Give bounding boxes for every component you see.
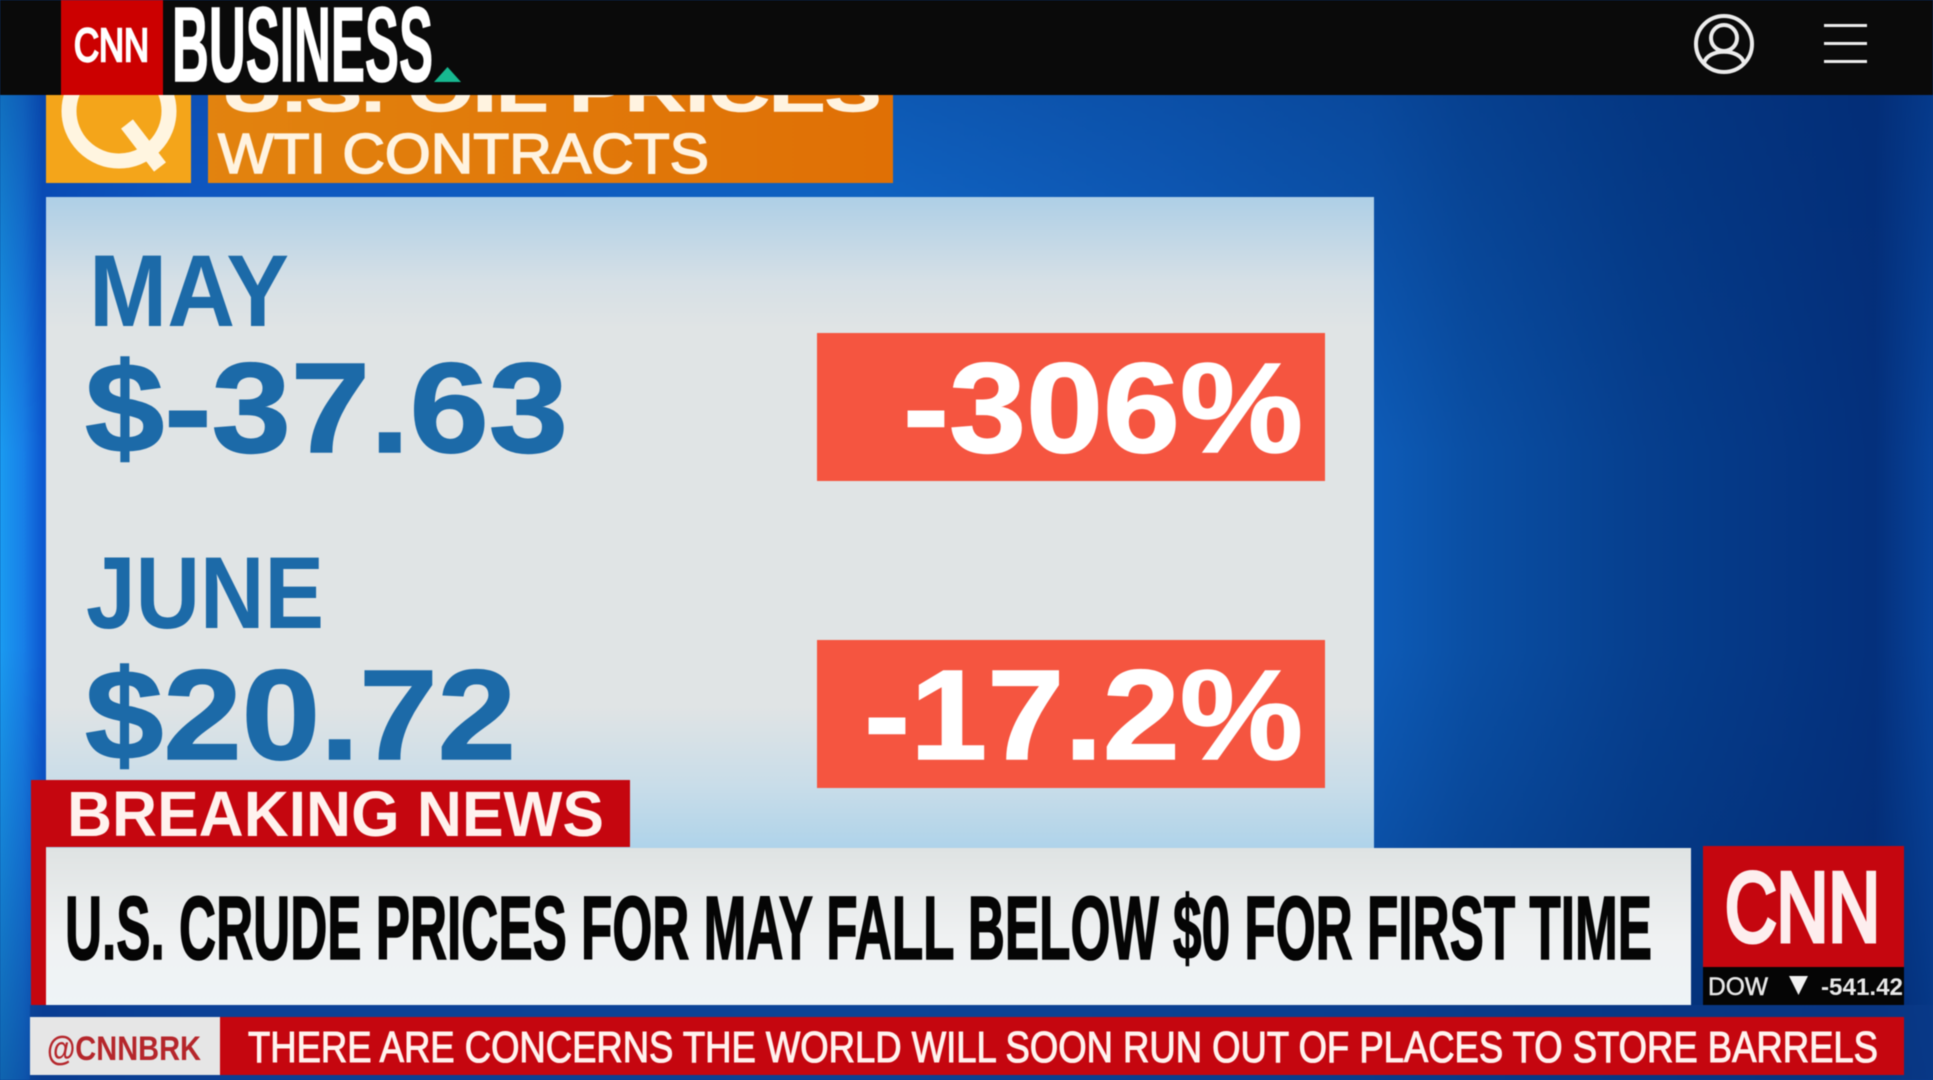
May price: $-37.63 xyxy=(85,337,568,480)
June label: JUNE xyxy=(86,536,324,650)
ticker band xyxy=(30,1017,1904,1075)
May change badge: -306% xyxy=(903,337,1303,480)
Dow ticker: DOW xyxy=(1708,973,1768,1001)
May label: MAY xyxy=(89,234,289,348)
icon: user account xyxy=(1696,16,1752,72)
breaking news tab: BREAKING NEWS xyxy=(67,778,604,850)
June change badge: -17.2% xyxy=(864,644,1303,787)
CNN logo: CNN xyxy=(1725,852,1880,962)
Dow ticker xyxy=(1703,967,1904,1005)
June price: $20.72 xyxy=(85,644,516,787)
icon: hamburger menu xyxy=(1824,24,1867,63)
heading box: U.S. OIL PRICES xyxy=(222,57,881,124)
site header bar xyxy=(0,0,1933,104)
icon: green triangle xyxy=(434,67,461,82)
icon: Q logo xyxy=(46,61,191,183)
headline bar xyxy=(31,847,1691,1005)
CNN red logo block xyxy=(61,0,163,95)
heading box xyxy=(208,57,893,186)
panel: WTI contract prices xyxy=(46,197,1374,850)
handle box: @CNNBRK xyxy=(47,1030,201,1068)
panel: oil price header xyxy=(46,57,893,186)
handle box xyxy=(30,1017,220,1075)
heading box: WTI CONTRACTS xyxy=(218,122,709,186)
CNN red logo block: CNN xyxy=(74,19,149,71)
CNN network bug xyxy=(1703,846,1904,1005)
Dow ticker: -541.42 xyxy=(1821,974,1903,1001)
